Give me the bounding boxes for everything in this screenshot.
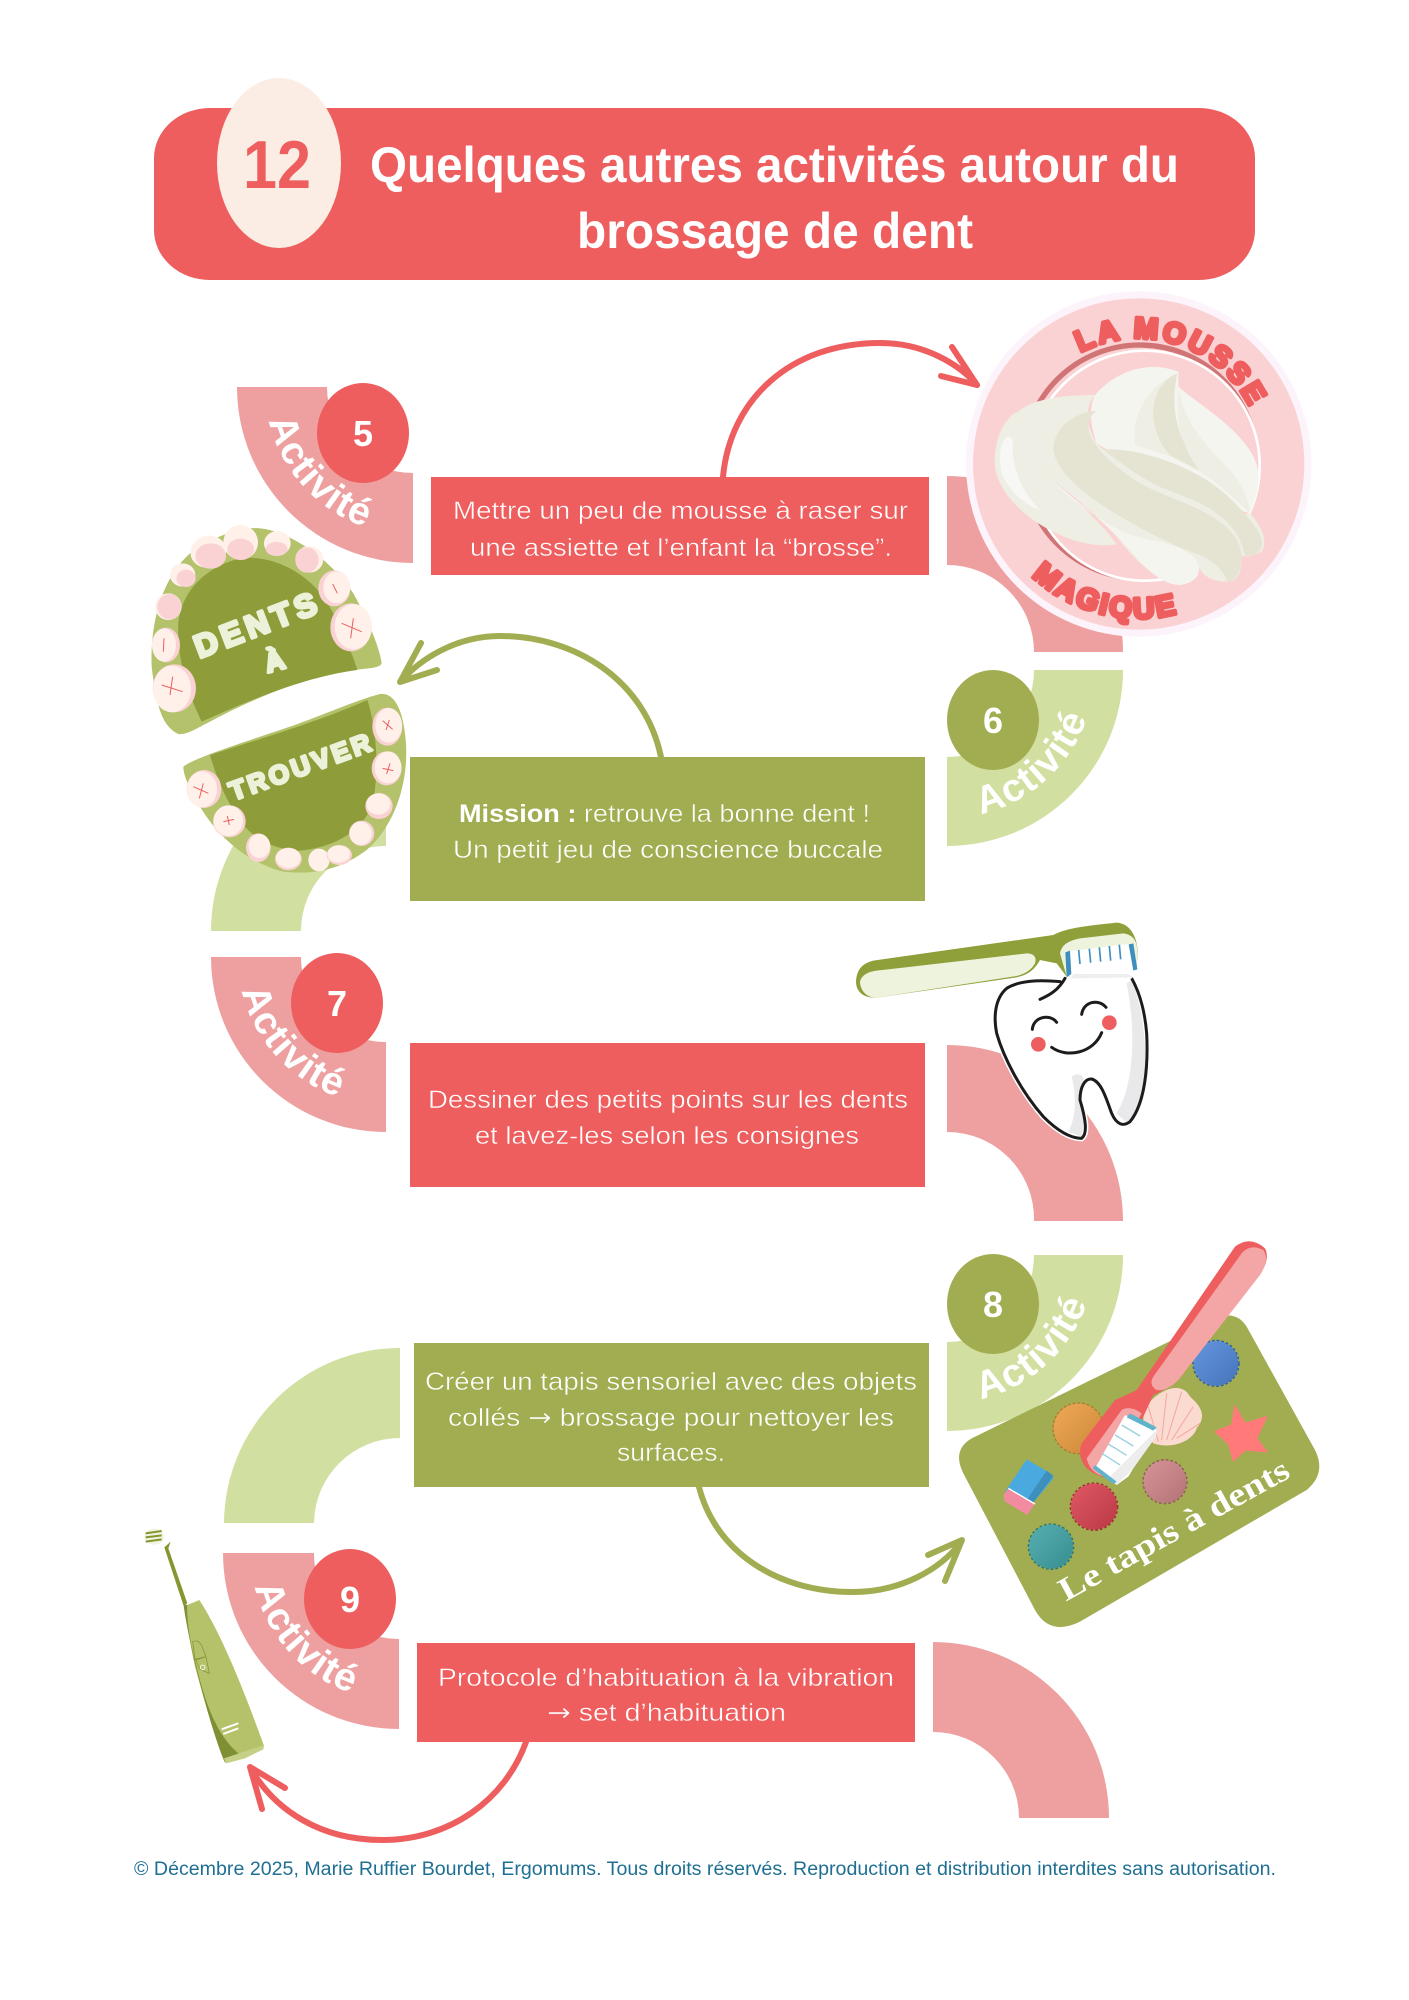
connector: pink curve after activity 5 xyxy=(947,476,1123,652)
activity 5 text box xyxy=(431,477,929,575)
activity 8 text box: collés → brossage pour nettoyer les xyxy=(448,1403,894,1432)
tooth xyxy=(995,978,1147,1138)
lower jaw xyxy=(183,694,406,873)
lower jaw: TROUVER xyxy=(225,727,375,806)
activity 8 badge xyxy=(947,1254,1123,1431)
activity 8 text box: Créer un tapis sensoriel avec des objets xyxy=(425,1368,917,1396)
activity 7 text box: Dessiner des petits points sur les dents xyxy=(428,1086,908,1114)
activity 5 badge: 5 xyxy=(353,413,373,454)
illustration: la mousse magique: MAGIQUE xyxy=(1030,560,1178,626)
illustration: le tapis à dents: Le tapis à dents xyxy=(1052,1452,1296,1609)
illustration: la mousse magique xyxy=(966,292,1311,636)
upper jaw xyxy=(151,525,382,734)
illustration: dents à trouver xyxy=(151,525,406,873)
illustration: le tapis à dents xyxy=(959,1241,1319,1627)
connector: pink curve after activity 7 xyxy=(947,1045,1123,1221)
activity 9 text box xyxy=(417,1643,915,1742)
activity 6 text box: Mission : retrouve la bonne dent ! xyxy=(459,800,870,828)
activity 6 badge xyxy=(947,670,1123,846)
activity 7 badge: 7 xyxy=(327,983,347,1024)
activity 9 text box: → set d’habituation xyxy=(547,1698,786,1727)
illustration: smiling tooth with toothbrush xyxy=(856,923,1147,1138)
activity 7 badge: Activité xyxy=(242,992,346,1094)
shell xyxy=(1143,1388,1202,1445)
star xyxy=(1215,1406,1267,1461)
activity 6 text box: Un petit jeu de conscience buccale xyxy=(453,836,883,864)
activity 6 text box xyxy=(410,757,925,901)
red toothbrush xyxy=(1080,1241,1267,1485)
activity 8 text box xyxy=(414,1343,929,1487)
arrow: activity 6 to teeth xyxy=(400,636,661,757)
activity 9 badge: Activité xyxy=(254,1588,358,1690)
illustration: la mousse magique: LA MOUSSE xyxy=(1072,316,1268,408)
activity 7 text box xyxy=(410,1043,925,1187)
activity 6 badge: 6 xyxy=(983,700,1003,741)
activity 8 text box: surfaces. xyxy=(617,1439,725,1467)
title banner: 12 xyxy=(243,127,311,203)
activity 6 badge: Activité xyxy=(982,710,1084,814)
illustration: electric toothbrush xyxy=(144,1529,264,1763)
upper jaw: À xyxy=(261,644,288,678)
activity 5 text box: Mettre un peu de mousse à raser sur xyxy=(453,497,908,525)
arrow: activity 9 to electric toothbrush xyxy=(250,1742,526,1840)
connector: green curve after activity 8 xyxy=(224,1348,400,1523)
activity 8 badge: Activité xyxy=(982,1296,1084,1400)
eraser xyxy=(1003,1459,1053,1515)
activity 5 badge: Activité xyxy=(268,422,372,524)
footer copyright: © Décembre 2025, Marie Ruffier Bourdet, Ergomums. Tous droits réservés. Reproduction et distribution interdites sans autorisation. xyxy=(134,1859,1276,1880)
activity 8 badge: 8 xyxy=(983,1284,1003,1325)
mat xyxy=(959,1315,1319,1627)
activity 9 badge: 9 xyxy=(340,1579,360,1620)
title banner: brossage de dent xyxy=(577,203,973,259)
arrow: activity 5 to foam xyxy=(723,343,977,477)
connector: green curve after activity 6 xyxy=(211,756,386,931)
connector: pink curve after activity 9 xyxy=(933,1642,1109,1818)
title banner: Quelques autres activités autour du xyxy=(370,137,1179,193)
arrow: activity 8 to sensory mat xyxy=(699,1487,962,1592)
activity 5 badge xyxy=(237,383,413,563)
activity 9 text box: Protocole d’habituation à la vibration xyxy=(438,1664,894,1692)
upper jaw: DENTS xyxy=(189,585,322,665)
bottle caps xyxy=(1029,1341,1239,1569)
activity 7 badge xyxy=(211,953,386,1132)
activity 7 text box: et lavez-les selon les consignes xyxy=(475,1122,859,1150)
activity 9 badge xyxy=(223,1549,399,1729)
toothbrush xyxy=(856,923,1138,998)
title banner xyxy=(154,78,1255,280)
activity 5 text box: une assiette et l’enfant la “brosse”. xyxy=(470,534,892,562)
